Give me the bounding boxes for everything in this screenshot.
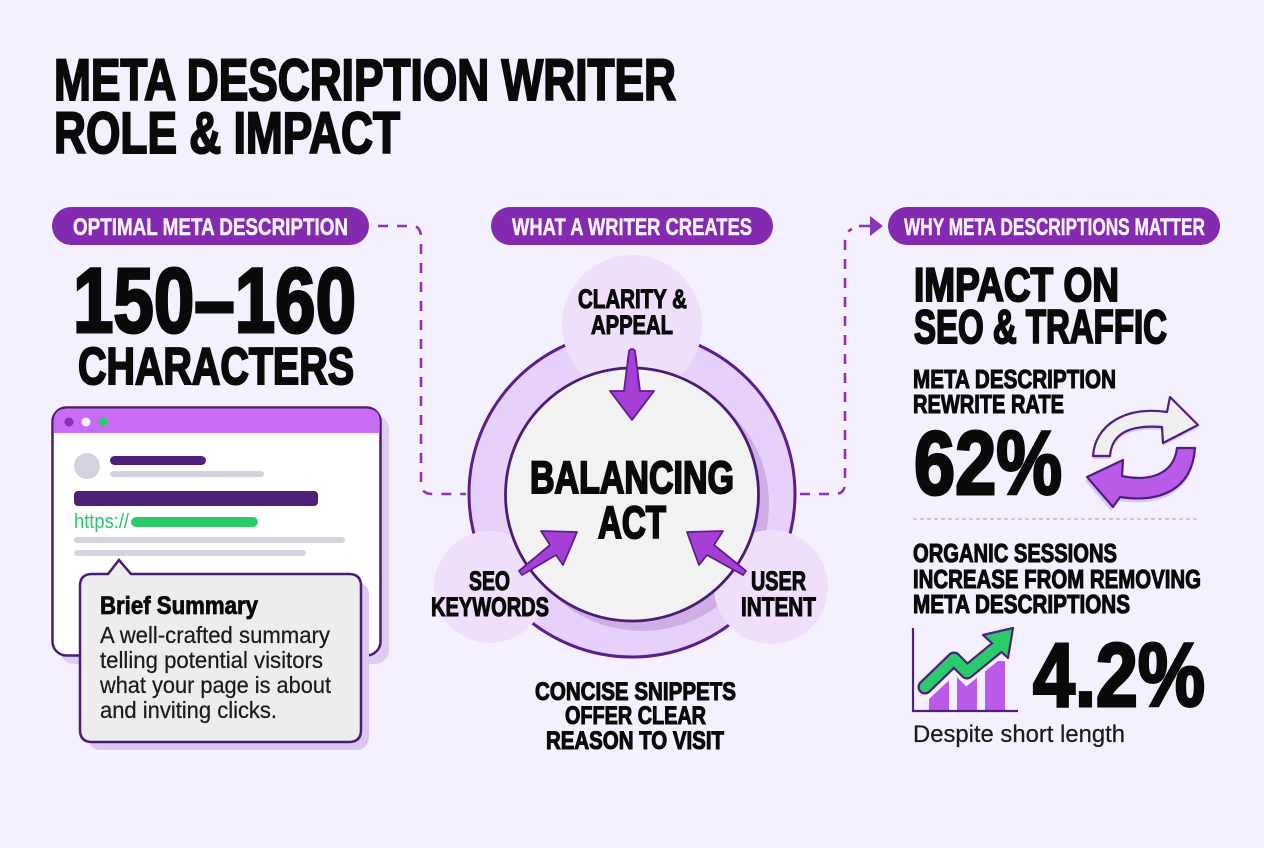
callout: brief summary: Brief Summary xyxy=(100,592,258,620)
callout: brief summary xyxy=(80,560,369,750)
label: user intent xyxy=(741,566,816,622)
arrow: top xyxy=(610,349,654,420)
stat label: rewrite rate: META DESCRIPTION xyxy=(913,364,1116,394)
pill heading: what a writer creates xyxy=(491,207,773,245)
big number: 150–160 characters xyxy=(73,250,356,396)
callout: brief summary: what your page is about xyxy=(99,672,332,698)
balancing ring diagram xyxy=(431,255,828,657)
pill heading: optimal meta description xyxy=(52,207,369,245)
panel: why meta descriptions matter xyxy=(888,207,1220,748)
caption: concise snippets: OFFER CLEAR xyxy=(565,702,706,730)
title: ROLE & IMPACT xyxy=(54,101,400,166)
label: balancing act xyxy=(530,452,734,548)
pill heading: why meta descriptions matter xyxy=(888,207,1220,245)
arrow: left xyxy=(519,531,577,575)
stat label: organic sessions: ORGANIC SESSIONS xyxy=(913,538,1117,568)
stat label: rewrite rate xyxy=(913,364,1116,419)
icon: growth chart xyxy=(913,628,1018,711)
browser search result mockup xyxy=(52,408,389,664)
caption: concise snippets xyxy=(535,678,736,755)
label: seo keywords: KEYWORDS xyxy=(431,592,549,622)
caption: concise snippets: CONCISE SNIPPETS xyxy=(535,678,736,706)
stat label: organic sessions: META DESCRIPTIONS xyxy=(913,589,1130,619)
connector: balancing ring to right pill xyxy=(800,216,883,494)
callout: brief summary: and inviting clicks. xyxy=(100,697,277,723)
label: clarity & appeal: APPEAL xyxy=(591,310,673,340)
stat: 4.2%: 4.2% xyxy=(1033,626,1205,726)
arrow: right xyxy=(687,531,746,575)
heading: impact on seo & traffic xyxy=(914,258,1167,353)
pill heading: optimal meta description: OPTIMAL META DESCRIPTION xyxy=(73,214,348,241)
browser search result mockup: https:// xyxy=(74,511,129,533)
big number: 150–160 characters: CHARACTERS xyxy=(78,338,354,396)
title: META DESCRIPTION WRITER xyxy=(54,48,676,113)
heading: impact on seo & traffic: IMPACT ON xyxy=(914,258,1119,311)
callout: brief summary: telling potential visitors xyxy=(100,647,323,673)
label: balancing act: ACT xyxy=(598,497,666,548)
panel: what a writer creates xyxy=(431,207,828,755)
label: user intent: INTENT xyxy=(741,592,816,622)
caption: concise snippets: REASON TO VISIT xyxy=(546,727,724,755)
stat: 62%: 62% xyxy=(914,414,1062,514)
pill heading: what a writer creates: WHAT A WRITER CREATES xyxy=(512,214,752,241)
divider xyxy=(913,518,1198,520)
big number: 150–160 characters: 150–160 xyxy=(73,250,356,352)
title xyxy=(54,48,676,166)
stat label: organic sessions xyxy=(913,538,1201,619)
label: seo keywords: SEO xyxy=(469,566,510,596)
label: clarity & appeal: CLARITY & xyxy=(578,284,687,314)
label: user intent: USER xyxy=(751,566,806,596)
heading: impact on seo & traffic: SEO & TRAFFIC xyxy=(914,300,1167,353)
label: balancing act: BALANCING xyxy=(530,452,734,503)
label: seo keywords xyxy=(431,566,549,622)
callout: brief summary: A well-crafted summary xyxy=(100,622,330,648)
stat label: rewrite rate: REWRITE RATE xyxy=(913,389,1064,419)
label: clarity & appeal xyxy=(578,284,687,340)
icon: rewrite arrows xyxy=(1085,397,1198,511)
panel: optimal meta description xyxy=(52,207,389,750)
connector: left pill to balancing ring xyxy=(378,226,466,494)
note: despite short length: Despite short length xyxy=(913,721,1125,748)
